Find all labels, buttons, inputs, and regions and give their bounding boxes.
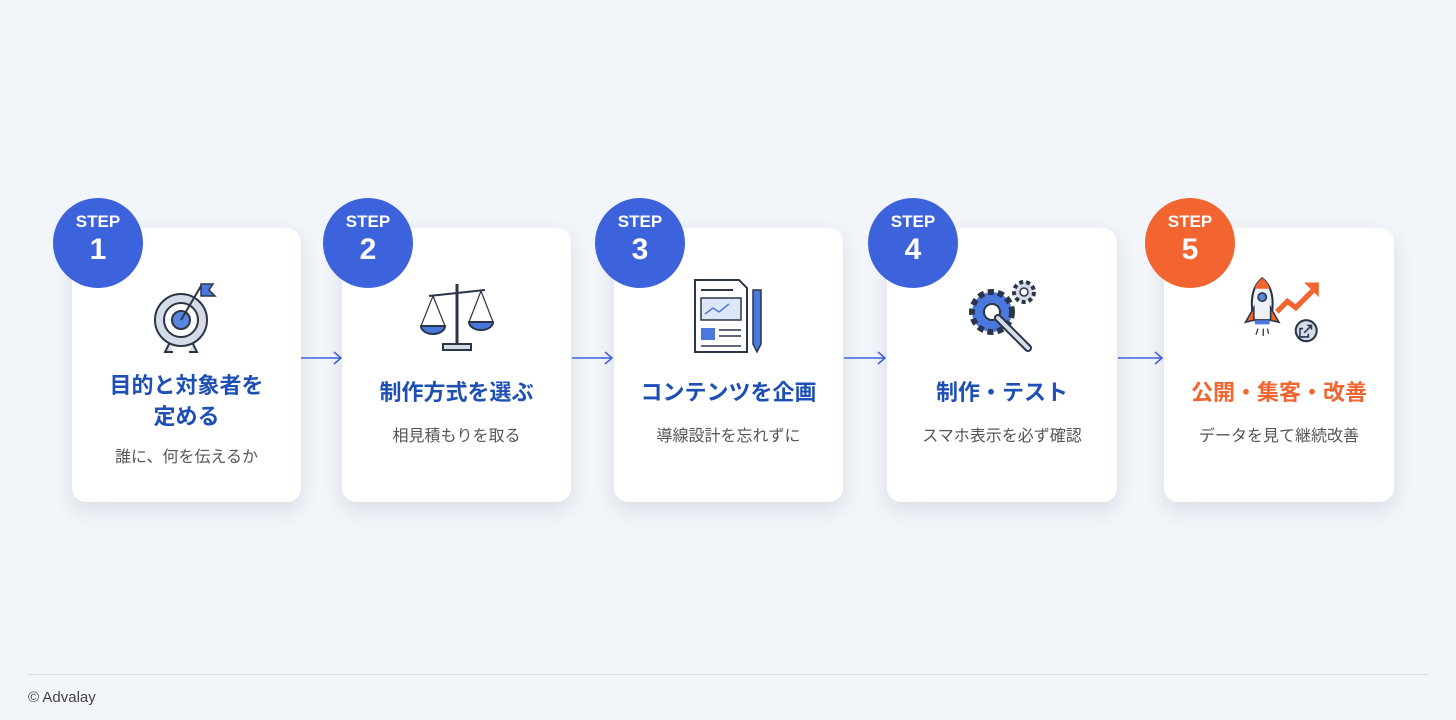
- subtitle: 誰に、何を伝えるか: [115, 449, 258, 466]
- card 4: [887, 228, 1117, 502]
- title: 制作方式を選ぶ: [379, 380, 534, 405]
- badge 5: STEP: [1168, 212, 1212, 231]
- arrow 3: [844, 352, 886, 364]
- title: 目的と対象者を: [109, 373, 264, 398]
- icon: rocket and growth arrow: [1244, 277, 1319, 342]
- subtitle: スマホ表示を必ず確認: [922, 428, 1082, 445]
- badge 1: [53, 198, 143, 288]
- badge 1: STEP: [76, 212, 120, 231]
- badge 3: STEP: [618, 212, 662, 231]
- title: 公開・集客・改善: [1191, 380, 1367, 405]
- badge 2: [323, 198, 413, 288]
- badge 4: [868, 198, 958, 288]
- icon: gears and wrench: [969, 280, 1036, 352]
- footer credit: © Advalay: [28, 689, 96, 706]
- title: [109, 373, 264, 429]
- badge 1: 1: [90, 233, 106, 266]
- card 1: [72, 228, 301, 502]
- title: コンテンツを企画: [640, 380, 816, 405]
- badge 3: 3: [632, 233, 648, 266]
- badge 5: 5: [1182, 233, 1198, 266]
- badge 4: 4: [905, 233, 921, 266]
- subtitle: データを見て継続改善: [1199, 428, 1359, 445]
- title: 定める: [153, 404, 220, 429]
- badge 2: 2: [360, 233, 376, 266]
- badge 2: STEP: [346, 212, 390, 231]
- card 2: [342, 228, 571, 502]
- icon: target: [154, 283, 217, 353]
- arrow 1: [301, 352, 342, 364]
- subtitle: 導線設計を忘れずに: [656, 428, 800, 445]
- badge 4: STEP: [891, 212, 935, 231]
- badge 5: [1145, 198, 1235, 288]
- card 3: [614, 228, 843, 502]
- arrow 4: [1118, 352, 1163, 364]
- arrow 2: [572, 352, 613, 364]
- icon: document and pen: [694, 279, 762, 354]
- subtitle: 相見積もりを取る: [392, 428, 520, 445]
- title: 制作・テスト: [936, 380, 1068, 405]
- icon: scales: [420, 284, 494, 351]
- badge 3: [595, 198, 685, 288]
- card 5: [1164, 228, 1394, 502]
